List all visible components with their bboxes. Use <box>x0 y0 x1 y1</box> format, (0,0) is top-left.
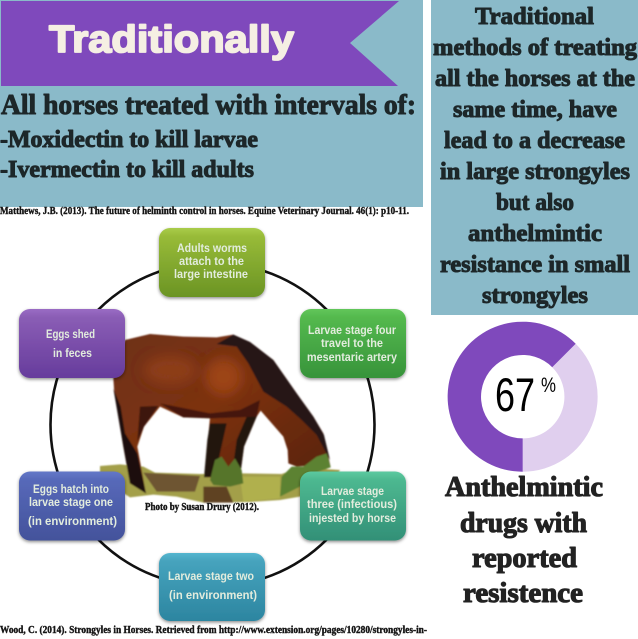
box: larvae stage two: (in environment) <box>169 588 257 602</box>
box: adult worms: large intestine <box>174 267 248 281</box>
photo: grazing horse <box>100 334 340 503</box>
donut caption: reported <box>472 543 577 574</box>
box: larvae stage three: Larvae stage <box>321 484 384 498</box>
diagram: strongyle life cycle <box>19 228 406 621</box>
box: eggs shed <box>19 309 125 378</box>
box: eggs hatch <box>19 472 125 540</box>
panel: right explanatory text: resistance in small <box>440 252 630 278</box>
box: adult worms: Adults worms <box>177 241 247 255</box>
photo credit: Photo by Susan Drury (2012). <box>145 502 259 513</box>
list item: ivermectin: -Ivermectin to kill adults <box>0 157 254 183</box>
panel: traditional treatment <box>0 0 423 207</box>
box: larvae stage three: three (infectious) <box>307 497 397 511</box>
citation: Wood: Wood, C. (2014). Strongyles in Horses. Retrieved from http://www.extension.org/pages/10280/strongyles-in- <box>0 625 427 636</box>
body <box>113 334 331 493</box>
box: eggs hatch: (in environment) <box>28 514 117 528</box>
panel: right explanatory text: same time, have <box>453 97 617 123</box>
donut caption: Anthelmintic <box>445 472 603 503</box>
banner ribbon <box>1 1 399 86</box>
grass tufts <box>210 457 243 487</box>
citation: Matthews: Matthews, J.B. (2013). The future of helminth control in horses. Equine Veterinary Journal. 46(1): p10-11. <box>0 206 409 217</box>
banner title: Traditionally <box>49 19 294 61</box>
panel: right explanatory text: lead to a decrease <box>444 128 625 154</box>
panel: right explanatory text: Traditional <box>475 4 594 30</box>
donut value: 67 <box>495 368 535 421</box>
cycle ring <box>50 263 374 587</box>
box: larvae stage two <box>159 553 265 621</box>
box: larvae stage four: travel to the <box>321 336 383 350</box>
box: eggs hatch: larvae stage one <box>29 495 113 509</box>
panel: right explanatory text <box>431 0 638 315</box>
panel: right explanatory text: anthelmintic <box>468 221 602 247</box>
donut caption <box>445 472 603 609</box>
donut caption: drugs with <box>460 508 587 539</box>
box: larvae stage four <box>300 309 406 378</box>
body highlight <box>205 358 242 395</box>
panel: right explanatory text: all the horses at the <box>435 66 635 92</box>
box: larvae stage three <box>300 472 406 540</box>
box: eggs hatch: Eggs hatch into <box>33 482 109 496</box>
donut chart: 67 percent <box>448 322 598 472</box>
box: eggs shed: in feces <box>53 346 92 360</box>
donut percent sign: % <box>541 374 556 397</box>
box: larvae stage two: Larvae stage two <box>168 569 254 583</box>
grass <box>100 464 340 503</box>
list item: moxidectin: -Moxidectin to kill larvae <box>0 127 258 153</box>
box: larvae stage three: injested by horse <box>309 511 396 525</box>
box: larvae stage four: Larvae stage four <box>308 323 396 337</box>
box: adult worms: attach to the <box>179 254 244 268</box>
box: larvae stage four: mesentaric artery <box>307 350 397 364</box>
donut caption: resistence <box>463 578 583 609</box>
heading: all horses: All horses treated with intervals of: <box>1 89 416 121</box>
mane <box>217 335 330 460</box>
panel: right explanatory text: but also <box>496 190 574 216</box>
panel: right explanatory text: methods of treating <box>433 35 637 61</box>
box: eggs shed: Eggs shed <box>46 327 95 341</box>
panel: right explanatory text: in large strongyles <box>440 159 630 185</box>
legs shadow <box>113 388 146 493</box>
panel: right explanatory text: strongyles <box>482 283 588 309</box>
box: adult worms <box>159 228 265 297</box>
